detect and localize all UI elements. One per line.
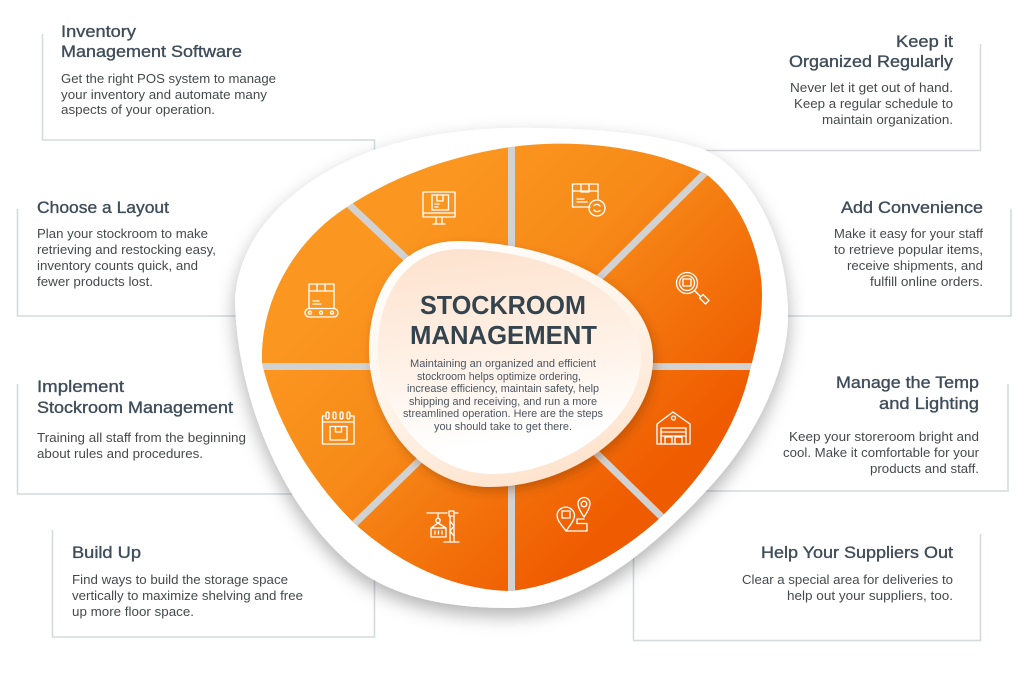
text: temp description: products and staff. (870, 461, 979, 476)
text: implement description: about rules and procedures. (37, 446, 203, 461)
text: keep organized description: Keep a regular schedule to (794, 96, 953, 111)
panel: manage the temp and lighting (700, 374, 1008, 491)
blob: inner panel (378, 249, 641, 474)
segment dividers (262, 146, 752, 591)
text: layout description: retrieving and restocking easy, (37, 242, 216, 257)
text: inventory description (61, 71, 276, 117)
text: central description: stockroom helps optimize ordering, (417, 371, 581, 383)
icon: box with refresh (572, 184, 605, 216)
heading: implement stockroom management: Implement (37, 378, 124, 396)
panel: keep it organized regularly (670, 33, 980, 150)
heading: manage the temp and lighting: and Lighting (879, 395, 979, 413)
text: central description (403, 358, 604, 433)
icon: magnifier with box (676, 272, 709, 304)
text: suppliers description: help out your suppliers, too. (787, 588, 953, 603)
text: implement description (37, 430, 246, 461)
text: temp description (783, 429, 980, 476)
panel: add convenience (780, 199, 1011, 316)
panel: white outer blob (235, 128, 788, 608)
heading: build up: Build Up (72, 544, 141, 562)
panel: inventory management software (42, 23, 374, 152)
text: build up description (72, 572, 303, 619)
heading: implement stockroom management: Stockroom Management (37, 399, 233, 417)
text: temp description: Keep your storeroom bright and (789, 429, 979, 444)
panel: build up (52, 530, 374, 637)
text: convenience description: Make it easy for your staff (834, 226, 983, 241)
text: temp description: cool. Make it comfortable for your (783, 445, 980, 460)
chart: orange segmented wheel (262, 144, 762, 591)
icon: crane with container (427, 511, 459, 542)
text: inventory description: your inventory and automate many (61, 87, 268, 102)
heading: help your suppliers out: Help Your Suppliers Out (761, 544, 953, 562)
text: convenience description: to retrieve popular items, (834, 242, 983, 257)
text: inventory description: aspects of your operation. (61, 102, 215, 117)
text: suppliers description: Clear a special area for deliveries to (742, 572, 953, 587)
panel: implement stockroom management (18, 378, 298, 494)
text: implement description: Training all staff from the beginning (37, 430, 246, 445)
panel: help your suppliers out (634, 534, 980, 640)
blob: cream ring (369, 241, 653, 487)
text: central description: shipping and receiving, and run a more (409, 396, 597, 408)
heading: manage the temp and lighting (836, 374, 979, 413)
panel: choose a layout (18, 199, 245, 316)
heading: inventory management software: Management Software (61, 43, 242, 61)
heading: keep it organized regularly: Organized Regularly (789, 53, 954, 71)
text: suppliers description (742, 572, 953, 603)
icon: box on conveyor (305, 284, 338, 317)
heading: add convenience: Add Convenience (841, 199, 983, 217)
text: keep organized description: maintain organization. (822, 112, 953, 127)
heading: implement stockroom management (37, 378, 233, 417)
text: convenience description: receive shipments, and (847, 258, 983, 273)
text: convenience description: fulfill online orders. (870, 274, 983, 289)
text: central description: increase efficiency, maintain safety, help (407, 383, 599, 395)
text: build up description: Find ways to build the storage space (72, 572, 288, 587)
heading: keep it organized regularly: Keep it (896, 33, 953, 51)
text: inventory description: Get the right POS system to manage (61, 71, 276, 86)
heading: manage the temp and lighting: Manage the Temp (836, 374, 979, 392)
text: convenience description (834, 226, 983, 289)
text: central description: Maintaining an organized and efficient (410, 358, 596, 370)
text: keep organized description: Never let it get out of hand. (790, 80, 953, 95)
heading: choose a layout: Choose a Layout (37, 199, 169, 217)
heading: inventory management software: Inventory (61, 23, 137, 41)
title (410, 290, 597, 350)
text: layout description: Plan your stockroom to make (37, 226, 208, 241)
icon: location pins route (557, 498, 590, 531)
text: layout description (37, 226, 216, 289)
title: STOCKROOM (420, 290, 586, 320)
text: build up description: up more floor space. (72, 604, 194, 619)
text: central description: you should take to get there. (434, 421, 572, 433)
icon: monitor with box (423, 192, 455, 224)
icon: calendar with box (322, 412, 354, 444)
panel: central blob (369, 241, 653, 487)
text: layout description: fewer products lost. (37, 274, 153, 289)
heading: keep it organized regularly (789, 33, 954, 71)
icon: warehouse (657, 412, 690, 444)
heading: inventory management software (61, 23, 242, 61)
text: keep organized description (790, 80, 953, 127)
title: MANAGEMENT (410, 320, 597, 350)
text: build up description: vertically to maximize shelving and free (72, 588, 303, 603)
text: central description: streamlined operation. Here are the steps (403, 408, 604, 420)
text: layout description: inventory counts quick, and (37, 258, 198, 273)
